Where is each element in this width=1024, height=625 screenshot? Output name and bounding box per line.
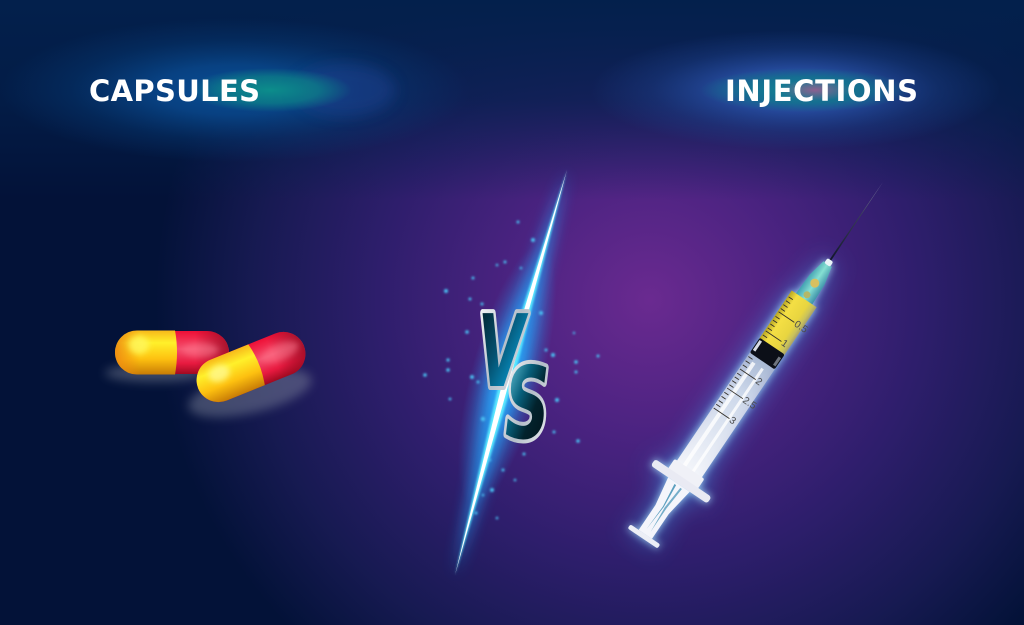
letter S: S (505, 345, 550, 462)
needle hub (794, 254, 839, 308)
heading glow: injections (590, 30, 1000, 150)
capsule shadows (105, 359, 316, 427)
letter S: S (505, 345, 550, 462)
sparkles (423, 220, 600, 519)
heading glow: capsules (0, 18, 470, 162)
barrel collar (668, 459, 704, 489)
barrel flange (651, 459, 712, 504)
heading: injections: INJECTIONS (725, 74, 918, 108)
graduation numbers: 3 (727, 415, 738, 427)
graduation numbers: 1 (779, 338, 790, 350)
clear barrel (676, 351, 776, 479)
heading: capsules: CAPSULES (89, 74, 260, 108)
vs lettering (478, 294, 550, 462)
plunger rod inside barrel (682, 362, 764, 474)
letter V: V (478, 294, 529, 410)
capsule: horizontal (115, 330, 229, 374)
icon: syringe (614, 163, 911, 557)
syringe glow (614, 243, 857, 557)
plunger end disc (628, 524, 660, 549)
graduation numbers: 2 (753, 376, 764, 389)
graduation numbers: 2.5 (740, 395, 758, 412)
letter V: V (478, 294, 529, 410)
barrel with yellow liquid (759, 291, 817, 355)
graduation ticks (714, 297, 804, 419)
graduation numbers (727, 319, 810, 432)
icon: capsules (105, 325, 316, 427)
plunger rods (635, 477, 690, 542)
rubber stopper (750, 338, 785, 369)
icon: vs lightning streak (437, 170, 577, 575)
needle (828, 181, 884, 263)
graduation numbers: 0.5 (792, 319, 810, 336)
capsule: tilted (190, 325, 312, 409)
